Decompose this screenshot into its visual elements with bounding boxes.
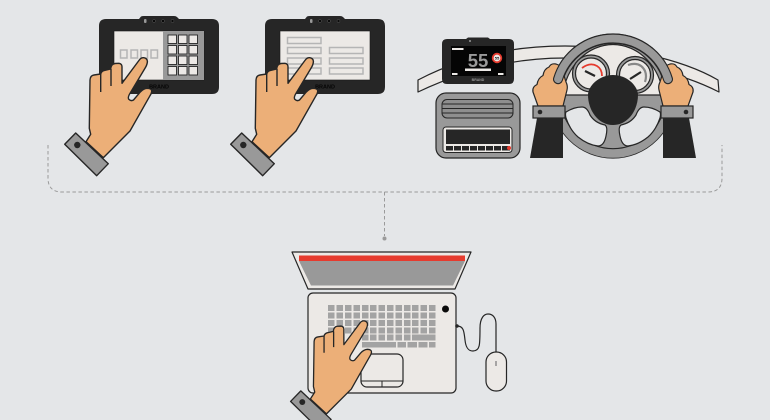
right hand on wheel (659, 64, 696, 158)
laptop base (308, 293, 456, 393)
gauge: rev counter (616, 56, 654, 94)
car dashboard strip (418, 46, 719, 92)
icon: hand typing on laptop (291, 321, 371, 420)
keyboard (328, 305, 436, 348)
wheel hub (588, 75, 638, 125)
laptop screen (292, 252, 471, 289)
radio display and buttons (443, 127, 512, 152)
wheel rim and spokes (551, 34, 675, 158)
speed reading: 55 (468, 50, 488, 71)
instrument panel (563, 44, 663, 95)
speed limit sign: 55 (495, 56, 500, 60)
car radio (436, 93, 520, 158)
radio grille (442, 100, 513, 118)
icon: hand tapping keypad tablet (65, 58, 152, 176)
laptop (291, 252, 471, 420)
upper rim over the hands (558, 38, 668, 79)
mouse cable (455, 314, 496, 352)
mouse (486, 352, 506, 391)
tablet with form fields touched by a hand (231, 16, 385, 176)
trackpad (361, 354, 403, 387)
navigation unit showing speed: BRAND (472, 78, 485, 82)
tablet with keypad touched by a hand (65, 16, 219, 176)
tablet screen: form fields (280, 31, 370, 80)
steering wheel with gauges and hands (530, 34, 696, 158)
power button (442, 306, 449, 312)
gauge: speedometer (572, 55, 610, 92)
left hand on wheel (530, 64, 567, 158)
icon: hand tapping form tablet (231, 58, 318, 176)
connector: dashed bracket joining the three devices to the laptop (48, 145, 722, 240)
navigation unit showing speed (442, 38, 514, 84)
tablet screen: keypad entry (114, 31, 204, 80)
